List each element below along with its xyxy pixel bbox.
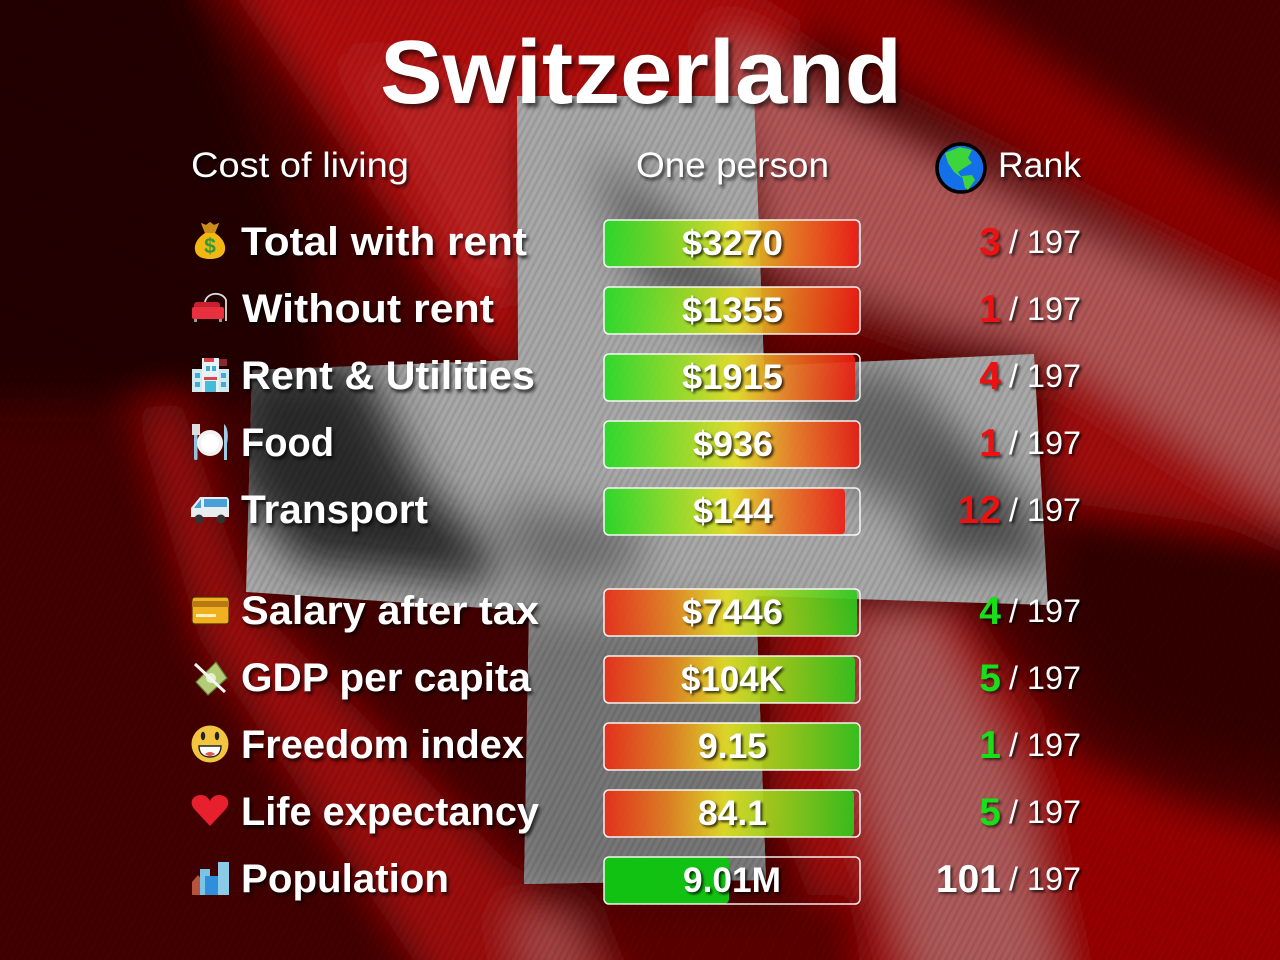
row: life expectancy: Life expectancy bbox=[241, 790, 540, 834]
icon: money bag: $ bbox=[204, 235, 216, 258]
icon: city buildings bbox=[192, 862, 229, 895]
row: salary after tax: $7446 bbox=[682, 593, 783, 632]
row: rent and utilities: / 197 bbox=[1009, 358, 1081, 394]
row: freedom index bbox=[192, 723, 1081, 770]
row: gdp per capita: 5 bbox=[979, 657, 1001, 700]
row: food bbox=[192, 421, 1081, 468]
row: transport: Transport bbox=[241, 488, 428, 532]
row: rent and utilities: 4 bbox=[979, 355, 1001, 398]
icon: money bag bbox=[195, 222, 225, 259]
row: food: Food bbox=[241, 421, 334, 465]
row: without rent: Without rent bbox=[242, 287, 494, 331]
icon: credit card bbox=[192, 597, 229, 624]
column heading: rank with globe bbox=[937, 144, 1081, 192]
row: total with rent bbox=[195, 220, 1081, 267]
row: freedom index: 9.15 bbox=[698, 727, 767, 766]
row: population: Population bbox=[241, 857, 449, 901]
row: transport: / 197 bbox=[1009, 492, 1081, 528]
row: life expectancy: 5 bbox=[979, 791, 1001, 834]
row: without rent bbox=[192, 287, 1081, 334]
row: gdp per capita: GDP per capita bbox=[241, 656, 532, 700]
row: salary after tax bbox=[192, 589, 1081, 636]
icon: couch and lamp bbox=[192, 294, 226, 322]
icon: van bbox=[191, 497, 229, 524]
row: without rent: 1 bbox=[979, 288, 1001, 331]
row: food: / 197 bbox=[1009, 425, 1081, 461]
row: gdp per capita: $104K bbox=[681, 660, 784, 699]
row: transport: $144 bbox=[693, 492, 774, 531]
row: transport bbox=[191, 488, 1081, 535]
row: gdp per capita bbox=[195, 656, 1081, 703]
row: population: 9.01M bbox=[683, 861, 781, 900]
row: life expectancy bbox=[192, 790, 1081, 837]
row: salary after tax: Salary after tax bbox=[241, 589, 539, 633]
icon: hotel bbox=[192, 358, 229, 392]
row: rent and utilities: $1915 bbox=[682, 358, 783, 397]
row: transport: 12 bbox=[958, 489, 1001, 532]
column heading: rank with globe: Rank bbox=[998, 146, 1081, 185]
icon: banknotes bbox=[195, 662, 227, 695]
title: Switzerland bbox=[380, 23, 902, 123]
row: population: / 197 bbox=[1009, 861, 1081, 897]
row: life expectancy: 84.1 bbox=[698, 794, 767, 833]
white cross of the flag bbox=[246, 96, 1048, 884]
row: freedom index: 1 bbox=[979, 724, 1001, 767]
row: without rent: $1355 bbox=[682, 291, 783, 330]
row: food: $936 bbox=[693, 425, 773, 464]
column heading: one person: One person bbox=[636, 146, 829, 185]
row: rent and utilities bbox=[192, 354, 1081, 401]
column heading: cost of living: Cost of living bbox=[191, 146, 409, 185]
row: freedom index: / 197 bbox=[1009, 727, 1081, 763]
row: total with rent: Total with rent bbox=[241, 220, 527, 264]
row: freedom index: Freedom index bbox=[241, 723, 524, 767]
icon: plate with cutlery bbox=[192, 424, 228, 460]
row: life expectancy: / 197 bbox=[1009, 794, 1081, 830]
row: population bbox=[192, 857, 1081, 904]
row: population: 101 bbox=[936, 858, 1001, 901]
row: food: 1 bbox=[979, 422, 1001, 465]
row: salary after tax: 4 bbox=[979, 590, 1001, 633]
row: salary after tax: / 197 bbox=[1009, 593, 1081, 629]
icon: heart bbox=[192, 795, 228, 826]
row: total with rent: / 197 bbox=[1009, 224, 1081, 260]
row: total with rent: $3270 bbox=[682, 224, 783, 263]
row: without rent: / 197 bbox=[1009, 291, 1081, 327]
row: gdp per capita: / 197 bbox=[1009, 660, 1081, 696]
row: total with rent: 3 bbox=[979, 221, 1001, 264]
row: rent and utilities: Rent & Utilities bbox=[241, 354, 535, 398]
icon: smiling face bbox=[192, 726, 228, 762]
